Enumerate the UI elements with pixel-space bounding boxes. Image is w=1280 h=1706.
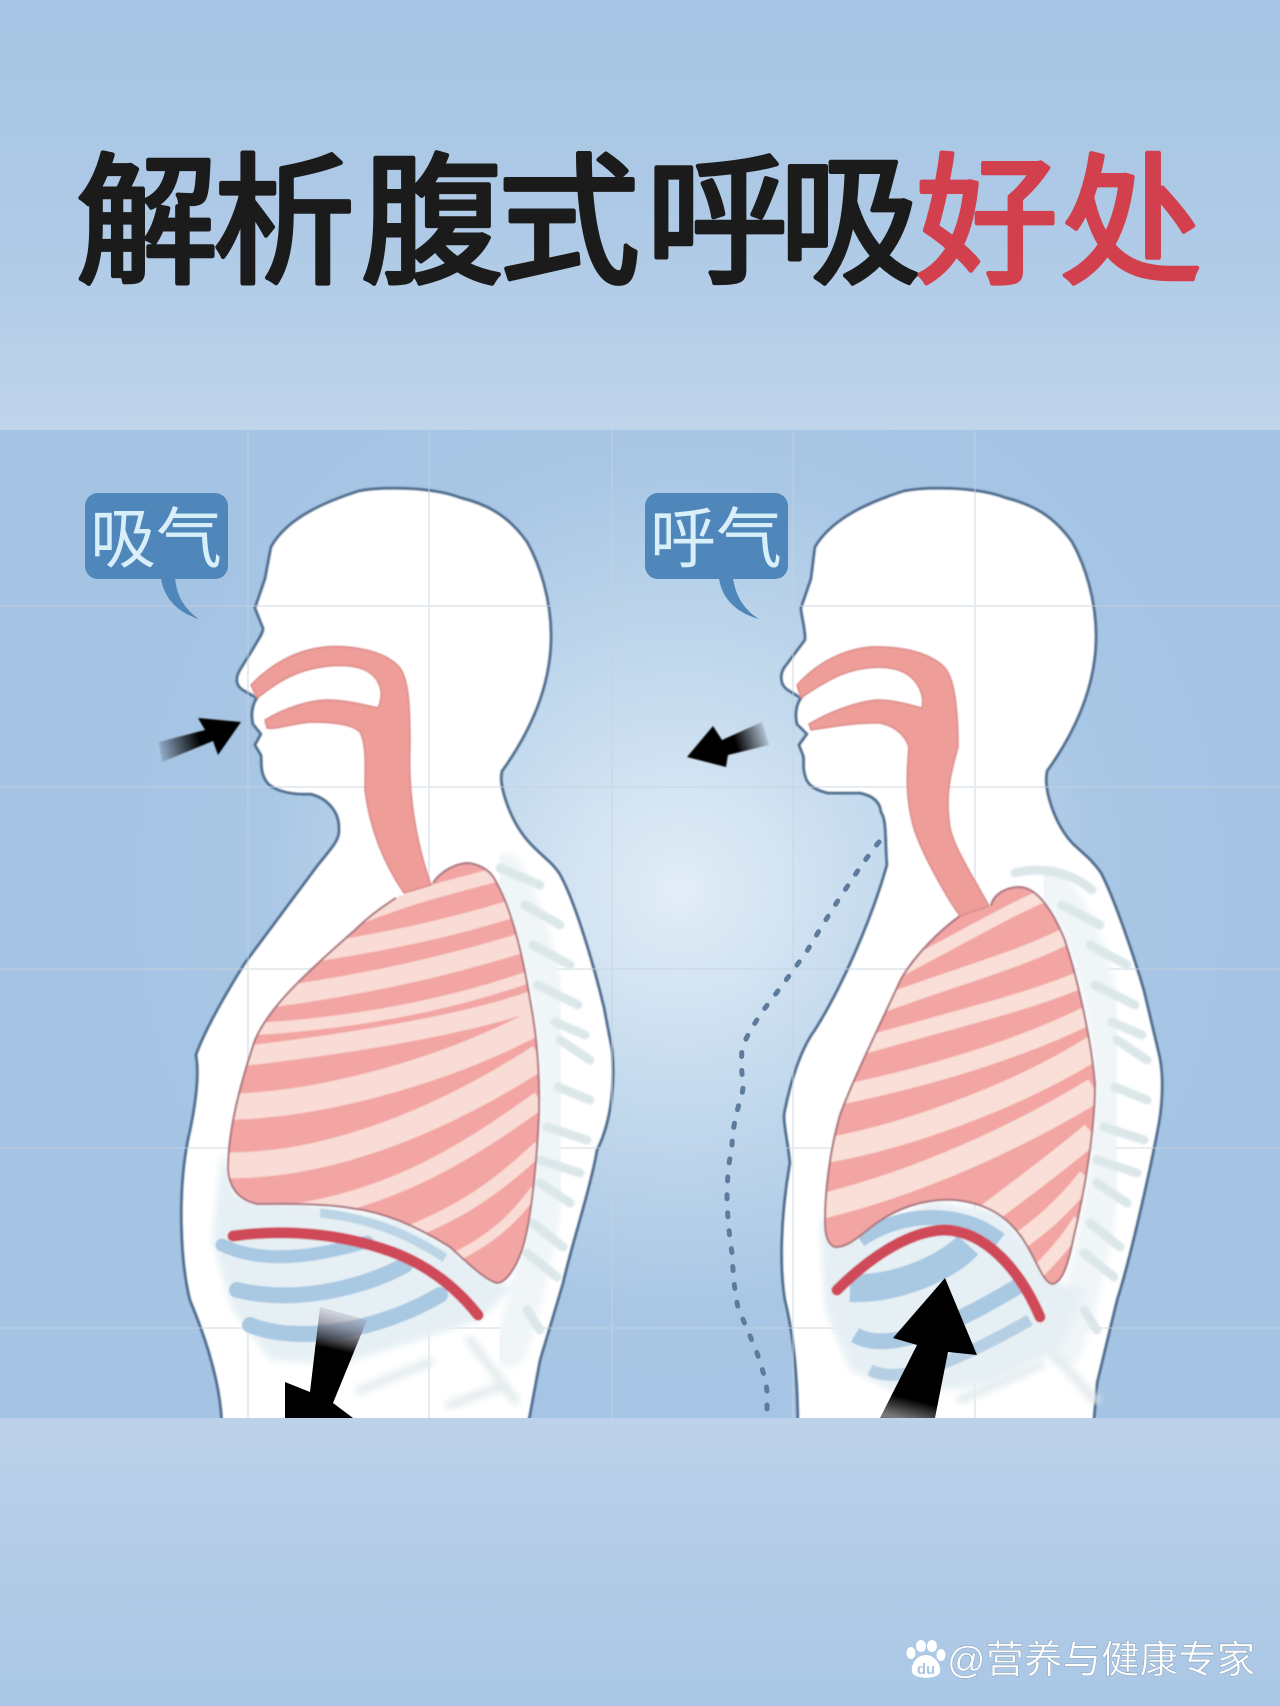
body silhouette: inhale bbox=[181, 488, 613, 1430]
diaphragm: inhale bbox=[233, 1233, 478, 1315]
speech bubble: inhale: 吸气 bbox=[90, 502, 222, 576]
background grid bbox=[0, 430, 1280, 1418]
abdomen: exhale organs bbox=[820, 1200, 1085, 1395]
exhale figure organs bbox=[797, 647, 1147, 1400]
body silhouette: exhale bbox=[781, 488, 1162, 1430]
airway: inhale bbox=[251, 647, 431, 893]
arrow: air in bbox=[159, 718, 241, 762]
icon: paw logo: du bbox=[917, 1661, 935, 1678]
ribcage: inhale back ribs bbox=[360, 868, 590, 1405]
abdomen: inhale organs bbox=[212, 1150, 515, 1365]
diagram panel background bbox=[0, 430, 1280, 1420]
footer background bbox=[0, 1418, 1280, 1706]
title: 解析腹式呼吸好处 bbox=[76, 144, 1202, 303]
speech bubble: exhale: 呼气 bbox=[650, 502, 782, 576]
speech bubble: inhale bbox=[85, 493, 228, 619]
diaphragm: exhale bbox=[837, 1230, 1040, 1317]
header background bbox=[0, 0, 1280, 431]
airway: exhale bbox=[797, 647, 989, 916]
watermark: @营养与健康专家 bbox=[947, 1639, 1255, 1682]
dotted outline of the inflated abdomen bbox=[727, 842, 879, 1416]
inhale figure organs bbox=[212, 647, 590, 1405]
arrow: air out bbox=[687, 722, 769, 767]
lung: inhale bbox=[215, 863, 540, 1283]
lung: exhale bbox=[805, 887, 1095, 1290]
ribcage: exhale back ribs bbox=[960, 870, 1147, 1400]
icon: paw logo bbox=[906, 1640, 946, 1678]
arrow: diaphragm down bbox=[285, 1307, 367, 1418]
speech bubble: exhale bbox=[645, 493, 788, 619]
arrow: diaphragm up bbox=[880, 1278, 977, 1418]
